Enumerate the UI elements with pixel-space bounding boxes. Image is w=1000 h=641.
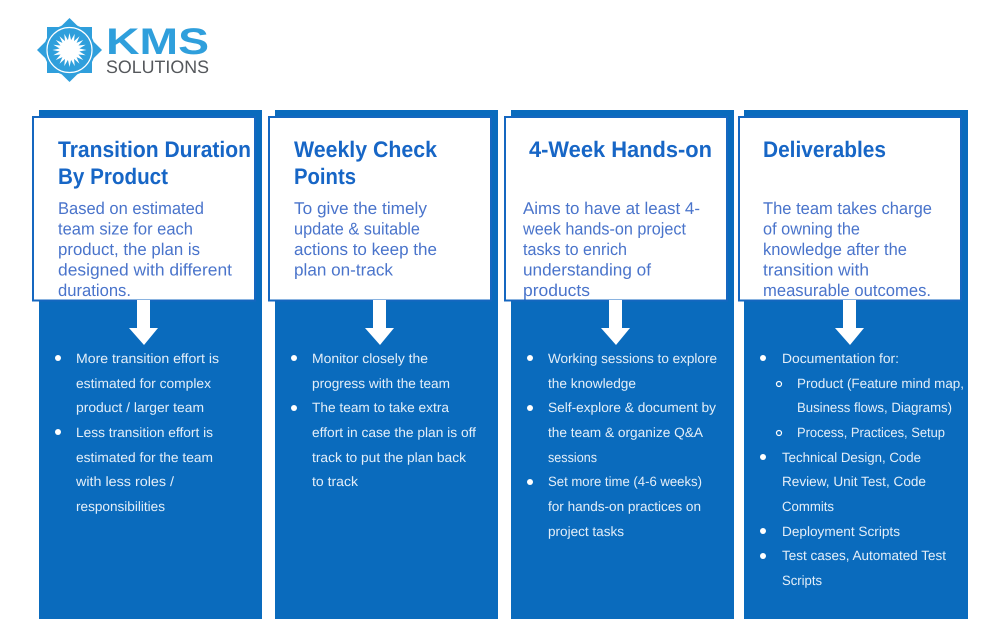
description: Aims to have at least 4- bbox=[523, 199, 700, 218]
description bbox=[763, 199, 932, 300]
icon: sun emblem bbox=[37, 18, 102, 82]
description: of owning the bbox=[763, 220, 860, 238]
bullet list: estimated for the team bbox=[76, 450, 213, 465]
heading bbox=[58, 137, 251, 189]
description: update & suitable bbox=[294, 220, 420, 238]
description bbox=[522, 199, 700, 300]
bullet list: estimated for complex bbox=[76, 376, 211, 391]
bullet list: the knowledge bbox=[548, 376, 636, 391]
heading: Transition Duration bbox=[58, 137, 251, 162]
card bbox=[269, 117, 491, 300]
bullet list: project tasks bbox=[548, 524, 624, 539]
bullet list: sessions bbox=[548, 450, 597, 465]
bullet list: effort in case the plan is off bbox=[312, 425, 476, 440]
bullet list: product / larger team bbox=[76, 400, 204, 415]
description: To give the timely bbox=[294, 199, 427, 218]
logo wordmark: KMS bbox=[106, 21, 209, 62]
heading: By Product bbox=[58, 164, 168, 189]
description: The team takes charge bbox=[763, 199, 932, 218]
bullet list: Self-explore & document by bbox=[548, 400, 716, 415]
heading: Weekly Check bbox=[294, 137, 437, 162]
description: team size for each bbox=[58, 220, 193, 238]
bullet list bbox=[760, 351, 964, 588]
description bbox=[58, 199, 232, 300]
bullet list: Commits bbox=[782, 499, 834, 514]
bullet list: Monitor closely the bbox=[312, 351, 428, 366]
bullet list: track to put the plan back bbox=[312, 450, 466, 465]
description: plan on-track bbox=[294, 260, 393, 280]
heading bbox=[294, 137, 437, 189]
description: actions to keep the bbox=[294, 240, 437, 259]
bullet list: More transition effort is bbox=[76, 351, 219, 366]
arrow bbox=[365, 300, 394, 345]
logo subtitle: SOLUTIONS bbox=[106, 57, 209, 77]
heading: 4-Week Hands-on bbox=[529, 137, 712, 162]
description bbox=[294, 199, 437, 280]
panel: Weekly Check Points bbox=[269, 110, 498, 619]
arrow bbox=[129, 300, 158, 345]
panel background bbox=[39, 110, 262, 619]
panel: 4-Week Hands-on bbox=[505, 110, 734, 619]
arrow bbox=[601, 300, 630, 345]
bullet list: Deployment Scripts bbox=[782, 524, 900, 539]
bullet list: Set more time (4-6 weeks) bbox=[548, 474, 702, 489]
bullet list: Documentation for: bbox=[782, 351, 899, 366]
bullet list: Working sessions to explore bbox=[548, 351, 717, 366]
bullet list: progress with the team bbox=[312, 376, 450, 391]
logo: KMS Solutions bbox=[37, 18, 209, 82]
bullet list: the team & organize Q&A bbox=[548, 425, 703, 440]
description: tasks to enrich bbox=[523, 240, 627, 259]
description: designed with different bbox=[58, 260, 232, 280]
description: Based on estimated bbox=[58, 199, 204, 218]
description: measurable outcomes. bbox=[763, 281, 931, 300]
bullet list: Product (Feature mind map, bbox=[797, 376, 964, 391]
description: understanding of bbox=[523, 260, 651, 280]
bullet list bbox=[527, 351, 717, 539]
bullet list: Review, Unit Test, Code bbox=[782, 474, 926, 489]
panel: Deliverables bbox=[739, 110, 968, 619]
bullet list: The team to take extra bbox=[312, 400, 449, 415]
bullet list: Process, Practices, Setup bbox=[797, 425, 945, 440]
arrow bbox=[835, 300, 864, 345]
heading: Deliverables bbox=[763, 137, 886, 162]
bullet list bbox=[55, 351, 219, 514]
panel background bbox=[275, 110, 498, 619]
bullet list: Technical Design, Code bbox=[782, 450, 921, 465]
card bbox=[739, 117, 961, 300]
panel background bbox=[744, 110, 968, 619]
bullet list: for hands-on practices on bbox=[548, 499, 701, 514]
bullet list: Business flows, Diagrams) bbox=[797, 400, 952, 415]
bullet list: to track bbox=[312, 474, 358, 489]
card bbox=[505, 117, 727, 300]
bullet list: Scripts bbox=[782, 573, 822, 588]
description: products bbox=[523, 281, 590, 300]
bullet list: with less roles / bbox=[75, 474, 174, 489]
card bbox=[33, 117, 255, 300]
bullet list: Test cases, Automated Test bbox=[782, 548, 946, 563]
description: week hands-on project bbox=[522, 220, 686, 238]
panel: Transition Duration By Product bbox=[33, 110, 262, 619]
panel background bbox=[511, 110, 734, 619]
description: durations. bbox=[58, 281, 131, 300]
bullet list: Less transition effort is bbox=[76, 425, 213, 440]
bullet list: responsibilities bbox=[76, 499, 165, 514]
heading: Points bbox=[294, 164, 356, 189]
bullet list bbox=[291, 351, 476, 489]
description: knowledge after the bbox=[763, 240, 907, 259]
description: transition with bbox=[763, 260, 869, 280]
description: product, the plan is bbox=[58, 240, 200, 259]
